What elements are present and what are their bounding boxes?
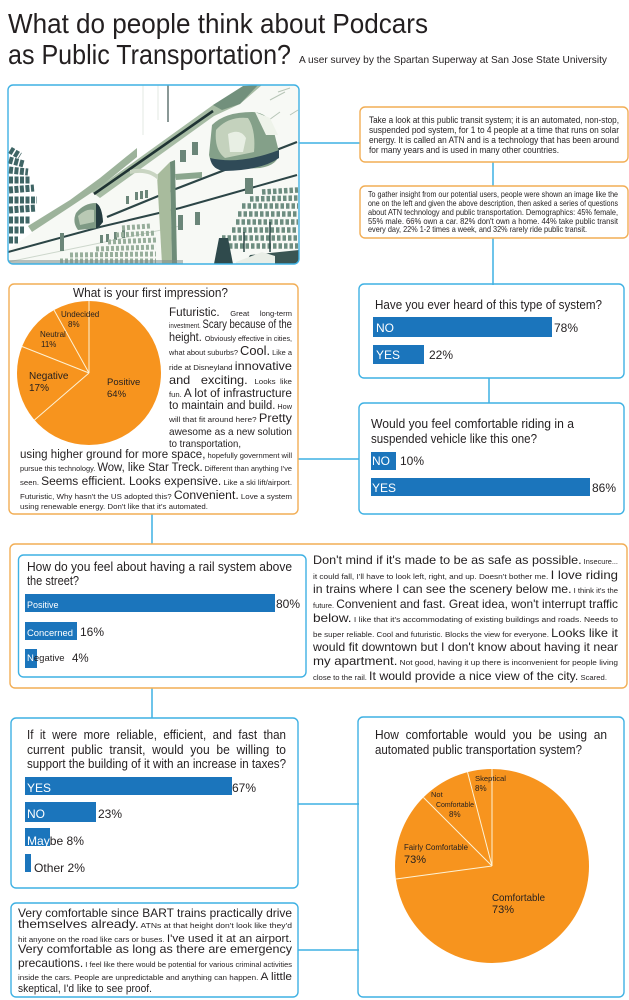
bar chart: heard of this system: YES [376, 348, 400, 362]
bar chart: suspended vehicle comfort: 86% [592, 481, 616, 495]
text block: first impression quotes: to maintain and build. How [169, 400, 293, 412]
bar chart: rail system: Negative [27, 653, 65, 664]
panel: system description: for many years and is used in many other countries. [369, 145, 559, 156]
panel: automation quotes [11, 903, 298, 997]
bar chart: taxes: Maybe 8% [27, 834, 84, 848]
pie chart: first impression: Undecided [61, 310, 99, 319]
text block: first impression quotes: to transportation, [169, 438, 241, 450]
panel: automated transit comfort [358, 717, 624, 997]
text block: rail system quotes: future. Convenient and fast. Great idea, won't interrupt traffic [313, 597, 618, 611]
heading: heard of this system: Have you ever heard of this type of system? [375, 297, 602, 312]
bar chart: heard of this system: 22% [429, 348, 453, 362]
bar chart: taxes [25, 777, 256, 875]
text block: automation quotes: themselves already. ATNs at that height don't look like they'd [18, 917, 292, 931]
heading: taxes question: current public transit, would you be willing to [27, 742, 286, 757]
bar chart: rail system: 16% [80, 625, 104, 639]
heading: first impression: What is your first impression? [73, 285, 228, 300]
title: What do people think about Podcars [8, 8, 428, 39]
bar chart: taxes: Other 2% [34, 861, 85, 875]
text block: first impression quotes: awesome as a new solution [169, 426, 292, 438]
text block: first impression quotes: using renewable energy. Don't like that it's automated. [20, 502, 208, 511]
building windows [60, 142, 253, 251]
bar chart: rail system: 4% [72, 653, 89, 665]
pie chart: automated transit comfort [395, 769, 589, 963]
text block: automation quotes: precautions. I feel like there would be potential for various criminal activities [18, 956, 292, 970]
heading: rail system question [27, 559, 292, 588]
pie chart: automated transit comfort: 8% [475, 784, 487, 793]
pie chart: first impression [17, 301, 161, 445]
bar chart: suspended vehicle comfort: YES [372, 481, 396, 495]
text block: first impression quotes: height. Obviously effective in cities, [169, 332, 292, 344]
heading: automated transit comfort: automated public transportation system? [375, 743, 582, 757]
text block: first impression quotes: what about suburbs? Cool. Like a [168, 343, 293, 358]
panel: willingness to pay taxes [11, 718, 298, 888]
panel: rail system above the street [10, 544, 627, 688]
heading: taxes question [27, 727, 286, 771]
text block: first impression quotes: and exciting. Looks like [169, 373, 292, 387]
panel: rail system survey chart [18, 555, 306, 677]
pie chart: automated transit comfort: Comfortable [492, 892, 545, 904]
upper track [28, 148, 137, 232]
pie chart: first impression: 11% [41, 340, 56, 349]
bar chart: rail system [25, 594, 300, 668]
pie chart: automated transit comfort: Comfortable [436, 800, 474, 809]
heading: taxes question: support the building of it with an increase in taxes? [27, 756, 286, 771]
heading: suspended vehicle comfort [371, 416, 575, 446]
text block: first impression quotes: ride at Disneyland innovative [169, 359, 292, 373]
bar chart: suspended vehicle comfort: NO [372, 454, 390, 468]
text block: automation quotes: inside the cars. People are unpredictable and anything can happen. A little [18, 971, 292, 983]
panel: suspended vehicle comfort [359, 403, 624, 514]
text block: first impression quotes: seen. Seems efficient. Looks expensive. Like a ski lift/airport. [20, 476, 292, 488]
bar chart: heard of this system: 78% [554, 321, 578, 335]
bar chart: rail system: Concerned [27, 628, 73, 638]
text block: rail system quotes: close to the rail. It would provide a nice view of the city. Scared. [313, 669, 607, 683]
bar chart: taxes: 67% [232, 781, 256, 795]
text block: automation quotes: Very comfortable since BART trains practically drive [18, 906, 292, 920]
text block: first impression quotes: using higher ground for more space, hopefully government will [20, 449, 292, 461]
small pod [74, 203, 103, 230]
text block: first impression quotes: Futuristic. Great long-term [169, 307, 292, 319]
pie chart: first impression: Negative [29, 371, 69, 382]
lower tracks [107, 142, 297, 217]
illustration: suspended podcar system [8, 85, 299, 264]
text block: automation quotes [18, 906, 292, 995]
left tree foliage [9, 150, 37, 240]
text block: automation quotes: Very comfortable as long as there are emergency [18, 942, 292, 956]
pie chart: first impression: 17% [29, 383, 49, 394]
text block: rail system quotes: it could fall, I'll have to look left, right, and up. Doesn't bother me. I love riding [313, 568, 618, 582]
pie chart: automated transit comfort: Fairly Comfortable [404, 843, 469, 852]
pie chart: first impression: Neutral [40, 330, 66, 339]
pie chart: automated transit comfort: 8% [449, 810, 461, 819]
bar chart: taxes: YES [27, 781, 51, 795]
subtitle: A user survey by the Spartan Superway at San Jose State University [299, 54, 608, 66]
panel: survey demographics [360, 186, 628, 238]
text block: rail system quotes: Don't mind if it's made to be as safe as possible. Insecure... [313, 553, 618, 567]
bar chart: heard of this system: NO [376, 321, 394, 335]
text block: rail system quotes: my apartment. Not good, having it up there is inconvenient for people living [313, 654, 618, 668]
large pod [209, 112, 279, 170]
bar chart: suspended vehicle comfort [371, 452, 616, 496]
title: as Public Transportation? [8, 39, 291, 70]
text block: first impression quotes: investment. Scary because of the [169, 319, 292, 331]
pie chart: first impression: 8% [68, 320, 80, 329]
text block: rail system quotes [312, 553, 619, 683]
right tree foliage [218, 190, 298, 246]
text block: first impression quotes: will that fit around here? Pretty [168, 413, 292, 425]
text block: first impression quotes: pursue this technology. Wow, like Star Treck. Different than anything I've [20, 462, 292, 474]
heading: rail system question: How do you feel about having a rail system above [27, 559, 292, 574]
heading: automated transit comfort [375, 728, 607, 757]
heading: suspended vehicle comfort: suspended vehicle like this one? [371, 431, 537, 446]
bar chart: taxes: 23% [98, 807, 122, 821]
panel: system description [360, 107, 628, 162]
bar chart: taxes: NO [27, 807, 45, 821]
text block: automation quotes: hit anyone on the road like cars or buses. I've used it at an airport. [18, 933, 292, 945]
pie chart: automated transit comfort: Skeptical [475, 774, 506, 783]
text block: first impression quotes [20, 307, 293, 511]
text block: rail system quotes: below. I like that it's accommodating of existing buildings and roads. Needs to [313, 611, 618, 625]
street foreground [214, 238, 233, 264]
bar chart: rail system: Positive [27, 600, 59, 610]
panel: first impression [9, 284, 298, 514]
heading: rail system question: the street? [27, 573, 79, 588]
text block: automation quotes: skeptical, I'd like to see proof. [18, 983, 152, 995]
pie chart: first impression: 64% [107, 389, 127, 400]
text block: rail system quotes: be super reliable. Cool and futuristic. Blocks the view for everyone. Looks like it [313, 626, 619, 640]
panel: survey demographics: every day, 22% 1-2 times a week, and 32% rarely ride public transit. [368, 224, 587, 234]
bar chart: heard of this system [373, 317, 578, 364]
pie chart: automated transit comfort: 73% [492, 904, 514, 916]
text block: first impression quotes: fun. A lot of infrastructure [169, 388, 292, 400]
heading: taxes question: If it were more reliable, efficient, and fast than [27, 727, 286, 742]
text block: first impression quotes: Futuristic, Why hasn't the US adopted this? Convenient. Love a system [20, 490, 292, 502]
text block: rail system quotes: in trains where I can see the scenery below me. I think it's the [313, 582, 618, 596]
title [8, 8, 428, 70]
heading: suspended vehicle comfort: Would you feel comfortable riding in a [371, 416, 575, 431]
pie chart: first impression: Positive [107, 377, 140, 388]
bar chart: rail system: 80% [276, 597, 300, 611]
heading: automated transit comfort: How comfortable would you be using an [375, 728, 607, 742]
column [157, 162, 172, 264]
connector lines between panels [152, 143, 493, 950]
pie chart: automated transit comfort: Not [431, 790, 444, 799]
middle tree foliage [60, 226, 156, 261]
pie chart: automated transit comfort: 73% [404, 854, 426, 866]
bar chart: suspended vehicle comfort: 10% [400, 454, 424, 468]
panel: heard of this system [359, 284, 624, 378]
text block: rail system quotes: would fit downtown but I don't know about having it near [312, 640, 618, 654]
